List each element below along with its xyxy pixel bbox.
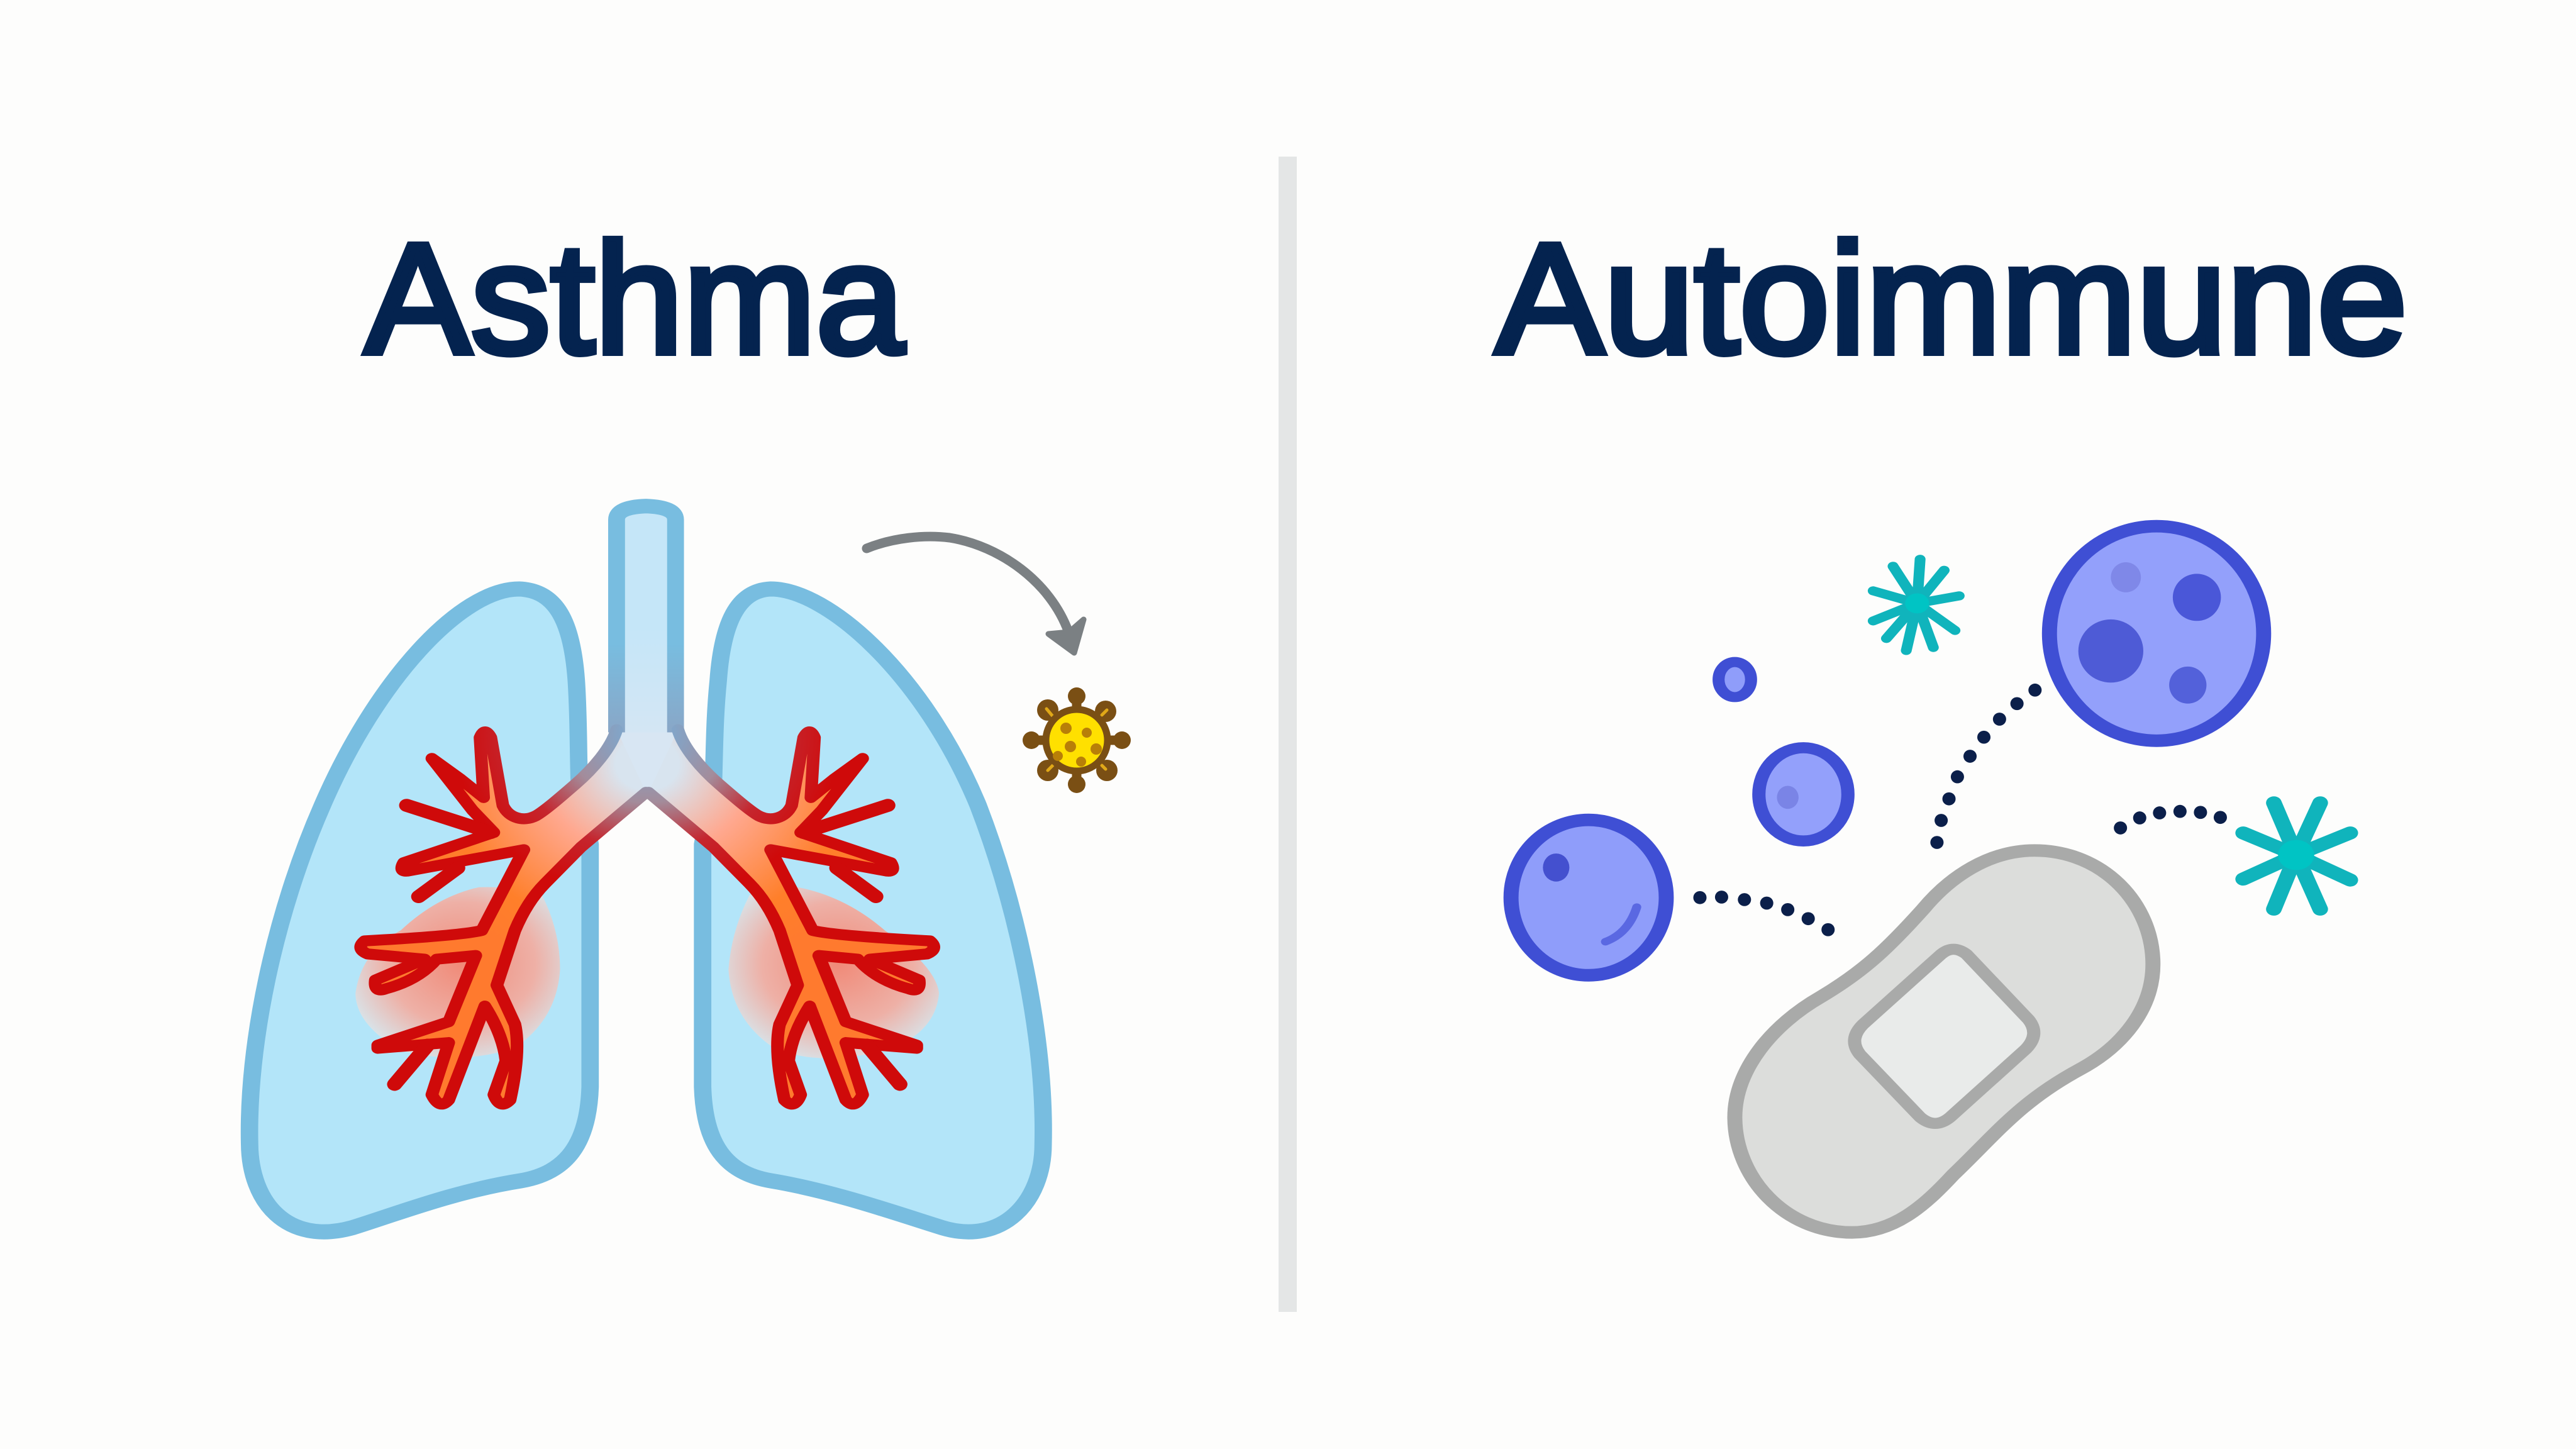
heading: Autoimmune: Autoimmune xyxy=(1496,211,2407,386)
left lung xyxy=(250,589,590,1232)
dotted path: bandage to asterisk xyxy=(2114,805,2227,835)
illustration: immune cells and bandage xyxy=(1511,526,2350,1233)
icon: virus xyxy=(1023,687,1131,793)
center divider xyxy=(1279,157,1297,1312)
right bronchial tree xyxy=(648,730,934,1104)
left cell xyxy=(1511,820,1666,975)
heading: Asthma: Asthma xyxy=(365,211,905,386)
middle cell xyxy=(1759,748,1848,841)
cytokine: top asterisk xyxy=(1873,559,1959,650)
right lung xyxy=(702,589,1043,1232)
fork fill xyxy=(563,722,731,806)
dotted path: left cell to bandage xyxy=(1693,891,1835,936)
large cell xyxy=(2050,526,2263,741)
left inflammation glow xyxy=(355,887,560,1058)
left bronchial tree xyxy=(360,730,646,1104)
icon: bandage xyxy=(1735,850,2153,1233)
cytokine: right asterisk xyxy=(2243,803,2350,909)
dotted path: large cell to bandage xyxy=(1930,684,2041,849)
arrow: curved toward virus xyxy=(867,536,1084,653)
right inflammation glow xyxy=(728,887,939,1058)
trachea xyxy=(616,506,675,732)
small cell xyxy=(1719,662,1751,697)
illustration: lungs xyxy=(250,506,1043,1232)
